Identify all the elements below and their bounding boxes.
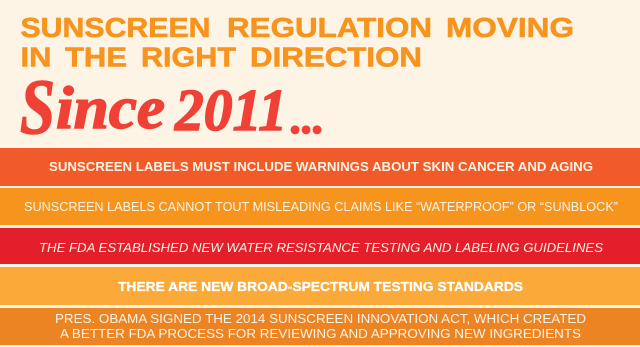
- title: IN: [20, 42, 52, 72]
- title: MOVING: [446, 12, 574, 43]
- band: misleading claims: SUNSCREEN LABELS CANNOT TOUT MISLEADING CLAIMS LIKE “WATERPROOF” OR “SUNBLOCK”: [24, 200, 618, 214]
- band: broad-spectrum: [0, 267, 640, 305]
- band: warnings: SUNSCREEN LABELS MUST INCLUDE WARNINGS ABOUT SKIN CANCER AND AGING: [49, 160, 593, 174]
- title: SUNSCREEN: [20, 12, 210, 43]
- title: [20, 12, 574, 72]
- band: warnings: [0, 148, 640, 186]
- band: innovation act: [0, 308, 640, 345]
- band: broad-spectrum: THERE ARE NEW BROAD-SPECTRUM TESTING STANDARDS: [118, 280, 523, 294]
- script heading: [20, 63, 324, 150]
- title: REGULATION: [227, 12, 432, 43]
- script heading: 2011: [174, 77, 287, 143]
- band: misleading claims: [0, 188, 640, 225]
- title: THE: [65, 42, 127, 72]
- band: water resistance: THE FDA ESTABLISHED NEW WATER RESISTANCE TESTING AND LABELING GUIDELINES: [39, 241, 604, 255]
- band: innovation act: PRES. OBAMA SIGNED THE 2014 SUNSCREEN INNOVATION ACT, WHICH CREATED: [55, 312, 586, 326]
- script heading: ...: [291, 92, 324, 143]
- band: water resistance: [0, 228, 640, 264]
- script heading: ince: [56, 75, 165, 141]
- title: DIRECTION: [250, 42, 422, 72]
- band: innovation act: A BETTER FDA PROCESS FOR REVIEWING AND APPROVING NEW INGREDIENTS: [60, 327, 581, 341]
- script heading: S: [20, 63, 55, 150]
- title: RIGHT: [141, 42, 236, 72]
